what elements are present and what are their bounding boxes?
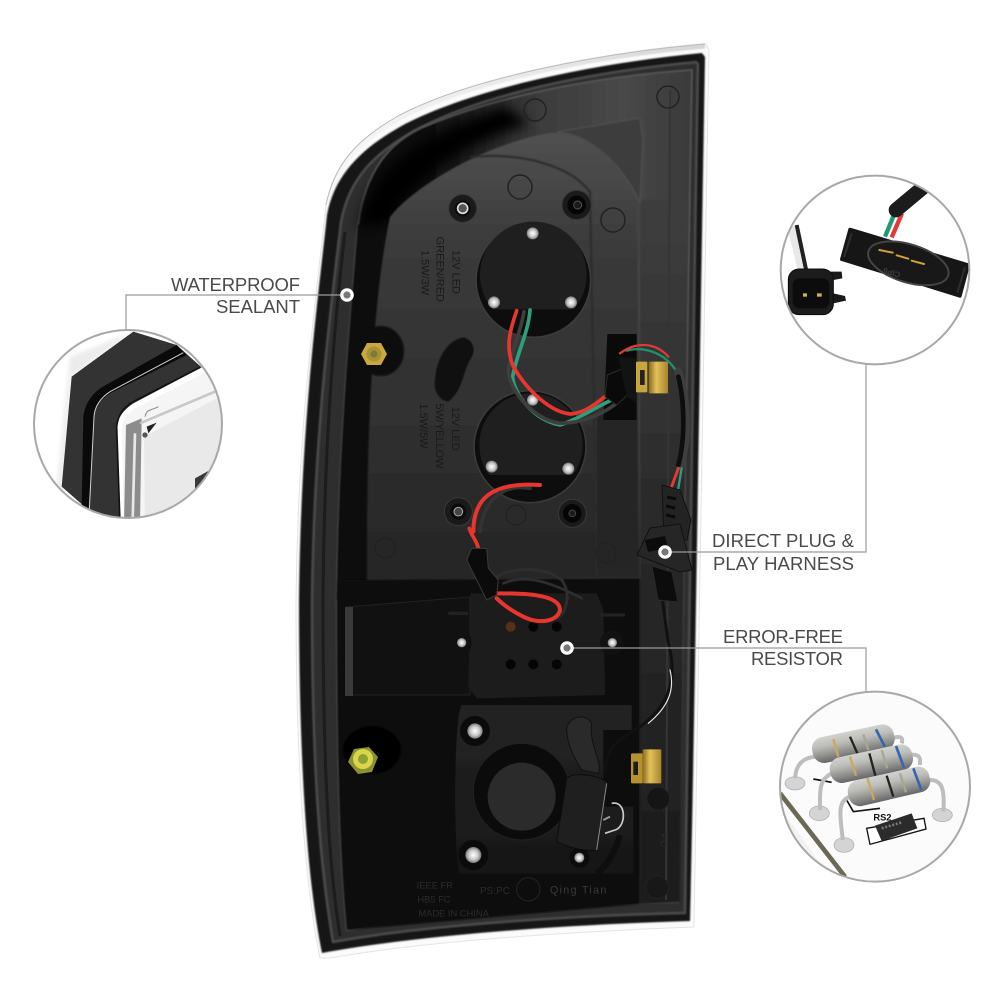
moulded spec text: 1.5W/5W <box>417 403 429 449</box>
inner dome <box>470 156 597 575</box>
right strip <box>640 200 688 904</box>
label waterproof: WATERPROOF <box>171 274 300 295</box>
main wire bundle <box>473 310 686 532</box>
stop lamp housing box <box>455 705 633 873</box>
left black column <box>337 214 392 600</box>
resistor module <box>448 593 625 698</box>
smd resistor: RS2 <box>873 812 891 822</box>
moulded maker marks: Qing Tian <box>550 884 608 896</box>
socket 2 <box>474 391 586 503</box>
cable <box>792 227 802 268</box>
bottom socket <box>458 716 589 870</box>
inset circle: connectors: CIP6 <box>881 265 902 279</box>
recessed left rectangle <box>346 597 470 695</box>
marker dot harness <box>660 547 670 557</box>
wire connector block <box>605 367 633 405</box>
resistor plug <box>467 548 498 600</box>
moulded maker marks: IEEE FR <box>417 880 453 890</box>
marker dot resistor <box>562 643 572 653</box>
bulb plug <box>557 775 623 873</box>
callout: direct plug and play harness <box>660 363 866 574</box>
inner tray <box>337 70 692 930</box>
pads <box>785 777 952 852</box>
corner moulded circles <box>375 86 679 563</box>
moulded maker marks: MADE IN CHINA <box>418 909 490 919</box>
callout: waterproof sealant <box>126 274 352 331</box>
moulded maker marks <box>417 833 669 919</box>
label harness: DIRECT PLUG & <box>712 530 855 551</box>
dark shadow over panel top <box>358 106 530 228</box>
inset circle: sealant close-up <box>33 329 223 519</box>
callout: direct plug and play harness: PLAY HARNESS <box>713 553 854 574</box>
harness plug <box>637 485 692 602</box>
inset circle: resistors <box>779 690 971 883</box>
grommet lower <box>567 717 599 773</box>
brass terminal lower <box>631 749 661 783</box>
lower raised strip <box>597 415 637 570</box>
moulded spec text: 12V LED <box>450 250 462 294</box>
callout: waterproof sealant: SEALANT <box>216 296 300 317</box>
lower assembly details <box>417 528 672 919</box>
resistor bodies <box>810 722 933 808</box>
smd resistor <box>867 812 926 844</box>
leader line harness <box>665 363 866 552</box>
moulded maker marks: PS:PC <box>480 886 510 897</box>
rubber grommet <box>435 337 473 402</box>
leader line waterproof <box>126 295 347 331</box>
moulded spec text: 12V LED <box>449 407 461 451</box>
marker dot waterproof <box>342 290 352 300</box>
moulded spec text: GREEN/RED <box>434 237 446 302</box>
upper raised panel <box>367 133 640 580</box>
moulded maker marks: HB5 FC <box>417 895 451 905</box>
raised wedge <box>557 118 643 203</box>
brass stud lower <box>343 726 401 774</box>
upper lamp wiring and sockets <box>417 190 686 532</box>
callout: error-free resistor: RESISTOR <box>751 648 843 669</box>
moulded spec text: 1.5W/3W <box>419 250 431 296</box>
large connector <box>842 229 968 296</box>
leader line resistor <box>567 648 866 692</box>
moulded maker marks: PC <box>658 833 669 847</box>
moulded spec text <box>417 237 462 469</box>
traces <box>813 779 880 812</box>
callout: error-free resistor <box>562 626 866 692</box>
brass stud upper <box>358 326 404 376</box>
small connector <box>830 272 846 303</box>
inset circle: connectors <box>780 174 970 366</box>
lower black cavity <box>337 578 640 930</box>
resistor legs <box>795 737 944 840</box>
board edge <box>780 793 845 877</box>
tail light housing <box>296 44 709 958</box>
chrome outer edge <box>296 44 709 958</box>
socket 1 <box>476 221 591 337</box>
resistor wires <box>469 528 582 621</box>
connector bay <box>603 334 637 420</box>
moulded spec text: 5W/YELLOW <box>433 403 445 469</box>
sealant channel rim <box>312 62 698 942</box>
black body <box>299 53 705 953</box>
thin harness wire <box>606 602 672 770</box>
label resistor: ERROR-FREE <box>723 626 843 647</box>
mounting screw bosses <box>444 190 591 527</box>
brass terminal <box>636 362 668 393</box>
